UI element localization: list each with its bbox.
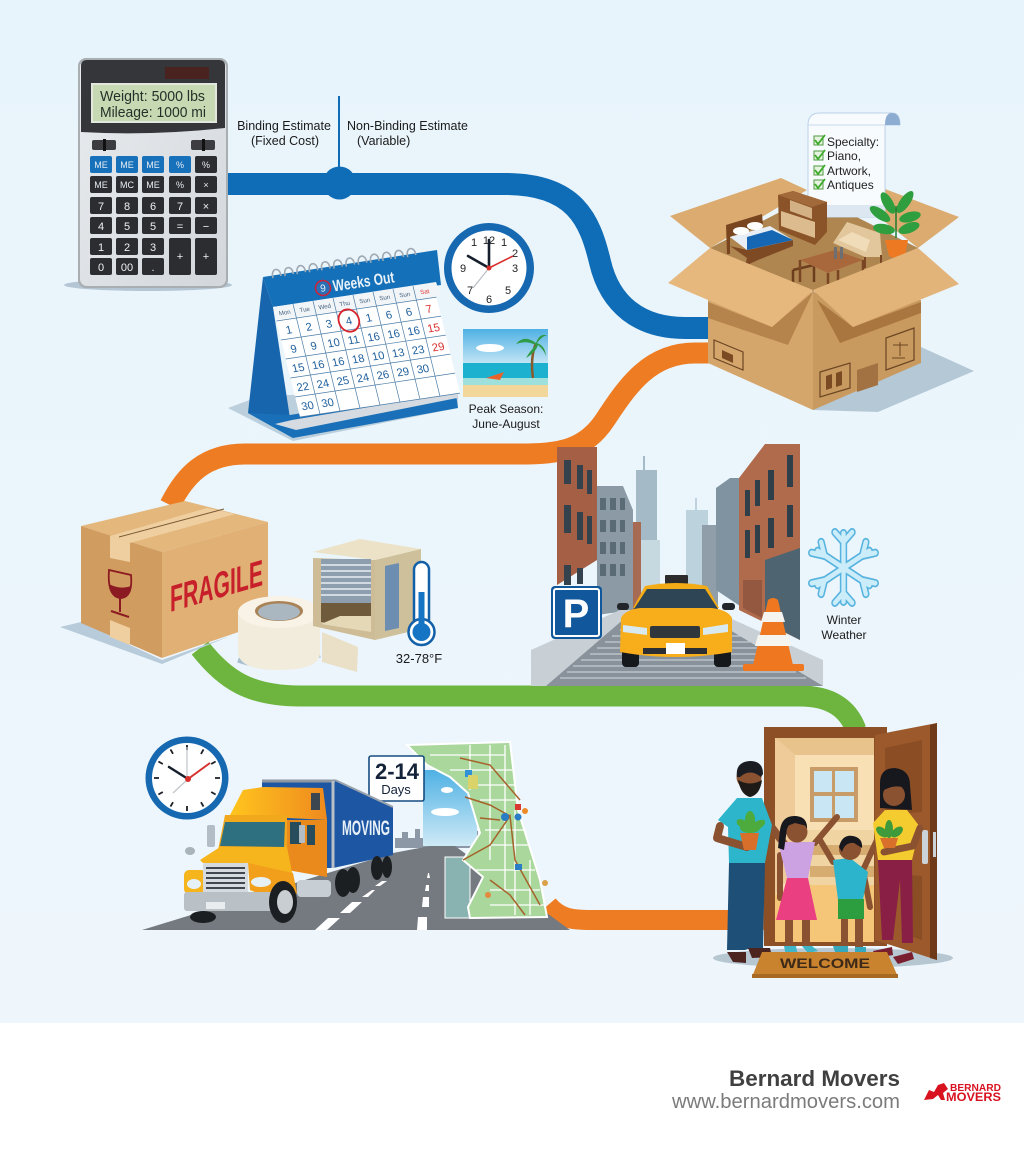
furniture: bed (726, 214, 793, 266)
icon: calculator: ME (94, 160, 108, 170)
icon: desk calendar: 15 (291, 362, 306, 375)
icon: thermometer (408, 562, 434, 645)
icon: desk calendar: 23 (411, 344, 426, 357)
icon: desk calendar: Mon (278, 309, 292, 317)
icon: parking sign: P (563, 592, 589, 636)
welcome mat (752, 952, 898, 978)
icon: calculator: ME (146, 180, 160, 190)
callout: transit days: Days (381, 782, 411, 797)
icon: wall clock top: 2 (512, 248, 518, 260)
icon: wall clock top: 1 (501, 237, 507, 249)
icon: desk calendar: 10 (326, 337, 341, 350)
icon: wall clock top: 1 (471, 237, 477, 249)
icon: desk calendar: 30 (320, 397, 335, 410)
icon: route map (407, 742, 548, 918)
icon: wall clock top (444, 223, 534, 313)
icon: desk calendar: Sun (379, 294, 391, 302)
icon: desk calendar: 6 (405, 306, 414, 319)
calendar heading: weeks out: Weeks Out (332, 269, 396, 295)
label: winter weather: Winter (827, 613, 861, 627)
icon: desk calendar: 30 (416, 363, 431, 376)
icon: clock lower (146, 736, 228, 820)
icon: desk calendar: 9 (309, 340, 318, 353)
icon: desk calendar: 16 (366, 331, 381, 344)
label: non-binding estimate: (Variable) (357, 134, 410, 148)
label: winter weather: Weather (821, 628, 867, 642)
label: binding estimate: Binding Estimate (237, 119, 331, 133)
icon: moving truck: MOVING (342, 817, 390, 840)
icon: desk calendar: 24 (316, 378, 331, 391)
icon: desk calendar: Sun (399, 291, 411, 299)
illustration: fragile box (60, 501, 268, 664)
icon: snowflake (812, 532, 875, 603)
icon: desk calendar: Tue (299, 306, 311, 314)
illustration: city street with taxi (531, 444, 823, 686)
icon: calculator: 6 (150, 201, 156, 213)
icon: calculator: 7 (98, 201, 104, 213)
checklist scroll: Antiques (827, 178, 874, 192)
illustration: family at front door (713, 723, 953, 978)
furniture: dresser (778, 191, 827, 245)
label: binding estimate: (Fixed Cost) (251, 134, 319, 148)
connector: orange path from route to family (548, 905, 770, 920)
icon: traffic cone (743, 598, 804, 671)
icon: desk calendar: Sun (359, 297, 371, 305)
icon: calculator: ME (120, 160, 134, 170)
icon: desk calendar: 16 (406, 325, 421, 338)
icon: taxi (617, 575, 735, 667)
illustration: highway (142, 829, 570, 930)
icon: calculator: 5 (150, 221, 156, 233)
footer brand name: Bernard Movers (729, 1066, 900, 1091)
footer logo: BERNARD (950, 1083, 1001, 1094)
icon: calculator: % (202, 160, 210, 170)
icon: desk calendar: 2 (305, 321, 314, 334)
label: peak season: Peak Season: (469, 402, 543, 416)
icon: desk calendar: 16 (386, 328, 401, 341)
icon: calculator: = (177, 221, 183, 233)
icon: calculator: × (203, 180, 209, 190)
doorway (764, 727, 887, 946)
footer website: www.bernardmovers.com (671, 1091, 900, 1113)
icon: calculator: 4 (98, 221, 104, 233)
icon: desk calendar: 13 (391, 347, 406, 360)
icon: desk calendar: 30 (300, 400, 315, 413)
icon: calculator: + (203, 251, 209, 263)
icon: storage unit (313, 539, 421, 640)
icon: calculator: + (177, 251, 183, 263)
icon: desk calendar: 15 (426, 322, 441, 336)
icon: calculator: Weight: 5000 lbs (100, 88, 205, 105)
illustration: open moving box with furniture (668, 113, 974, 412)
icon: beach picture (463, 329, 548, 397)
icon: calculator: % (176, 180, 184, 190)
icon: desk calendar: Wed (318, 303, 332, 311)
connector: green path from packing to door (200, 648, 856, 730)
icon: desk calendar: 24 (356, 372, 371, 385)
icon: wall clock top: 6 (486, 294, 492, 306)
connector: orange path from box to packing (170, 353, 712, 505)
icon: calculator: − (203, 221, 209, 233)
icon: moving truck (184, 780, 393, 923)
person: father (717, 761, 785, 963)
icon: calculator: 3 (150, 242, 156, 254)
welcome mat: WELCOME (780, 955, 870, 971)
icon: desk calendar: 25 (336, 375, 351, 388)
fragile label: FRAGILE (170, 553, 263, 621)
icon: desk calendar: Thu (339, 300, 351, 308)
person: mother (873, 768, 920, 964)
callout: transit days: 2-14 (375, 759, 420, 784)
icon: calculator: × (203, 201, 209, 213)
icon: calculator: 2 (124, 242, 130, 254)
icon: parking sign (551, 586, 602, 639)
icon: wall clock top: 12 (483, 235, 495, 247)
estimate divider with node (323, 96, 356, 200)
icon: calculator: 5 (124, 221, 130, 233)
icon: calculator: 1 (98, 242, 104, 254)
icon: desk calendar: 26 (376, 369, 391, 382)
icon: desk calendar: 1 (285, 324, 294, 337)
icon: calculator: ME (146, 160, 160, 170)
furniture: table and chair (793, 247, 863, 284)
icon: calculator: Mileage: 1000 mi (100, 104, 206, 121)
label: non-binding estimate: Non-Binding Estimate (347, 119, 468, 133)
label: temperature range: 32-78°F (396, 651, 442, 666)
icon: desk calendar: 22 (296, 381, 311, 394)
label: peak season: June-August (472, 417, 540, 431)
calendar heading: weeks out: 9 (320, 283, 327, 295)
icon: desk calendar: 11 (347, 334, 361, 347)
icon: desk calendar: 9 (289, 343, 298, 356)
icon: desk calendar: 29 (431, 341, 446, 355)
icon: calculator: 0 (98, 262, 104, 274)
icon: calculator: . (151, 262, 155, 274)
person: girl (776, 816, 837, 956)
icon: desk calendar: 3 (325, 318, 334, 331)
icon: calculator: 7 (177, 201, 183, 213)
open door (875, 723, 937, 960)
icon: wine glass (109, 570, 131, 617)
icon: calculator: % (176, 160, 184, 170)
plant (867, 188, 922, 258)
icon: desk calendar: 1 (365, 312, 374, 325)
icon: wall clock top: 7 (467, 285, 473, 297)
icon: wall clock top: 5 (505, 285, 511, 297)
icon: wall clock top: 9 (460, 263, 466, 275)
checklist scroll: Piano, (827, 149, 861, 163)
icon: desk calendar: 16 (331, 356, 346, 369)
icon: calculator: 8 (124, 201, 130, 213)
checklist scroll: Specialty: (827, 135, 879, 149)
icon: wall clock top: 3 (512, 263, 518, 275)
icon: desk calendar: 6 (385, 309, 394, 322)
icon: desk calendar: 4 (345, 315, 354, 328)
icon: calculator: MC (120, 180, 134, 190)
callout: transit days (369, 756, 424, 801)
checklist scroll: Artwork, (827, 164, 871, 178)
checklist scroll (808, 113, 900, 217)
icon: desk calendar (228, 249, 460, 441)
icon: desk calendar: 16 (311, 359, 326, 372)
furniture: sofa (833, 222, 882, 268)
icon: calculator: 00 (121, 262, 133, 274)
calendar heading: weeks out (314, 269, 396, 298)
person: boy (820, 836, 877, 955)
icon: desk calendar: 29 (396, 366, 411, 379)
icon: desk calendar: Sat (420, 288, 430, 296)
icon: packing tape roll (238, 596, 358, 672)
icon: desk calendar: 18 (351, 353, 366, 366)
icon: calculator: ME (94, 180, 108, 190)
footer logo: MOVERS (946, 1090, 1001, 1104)
icon: calculator (64, 58, 232, 291)
icon: desk calendar: 10 (371, 350, 386, 363)
footer logo (924, 1083, 1001, 1104)
connector: blue path from estimate to box (228, 184, 712, 328)
icon: desk calendar: 7 (425, 303, 434, 316)
